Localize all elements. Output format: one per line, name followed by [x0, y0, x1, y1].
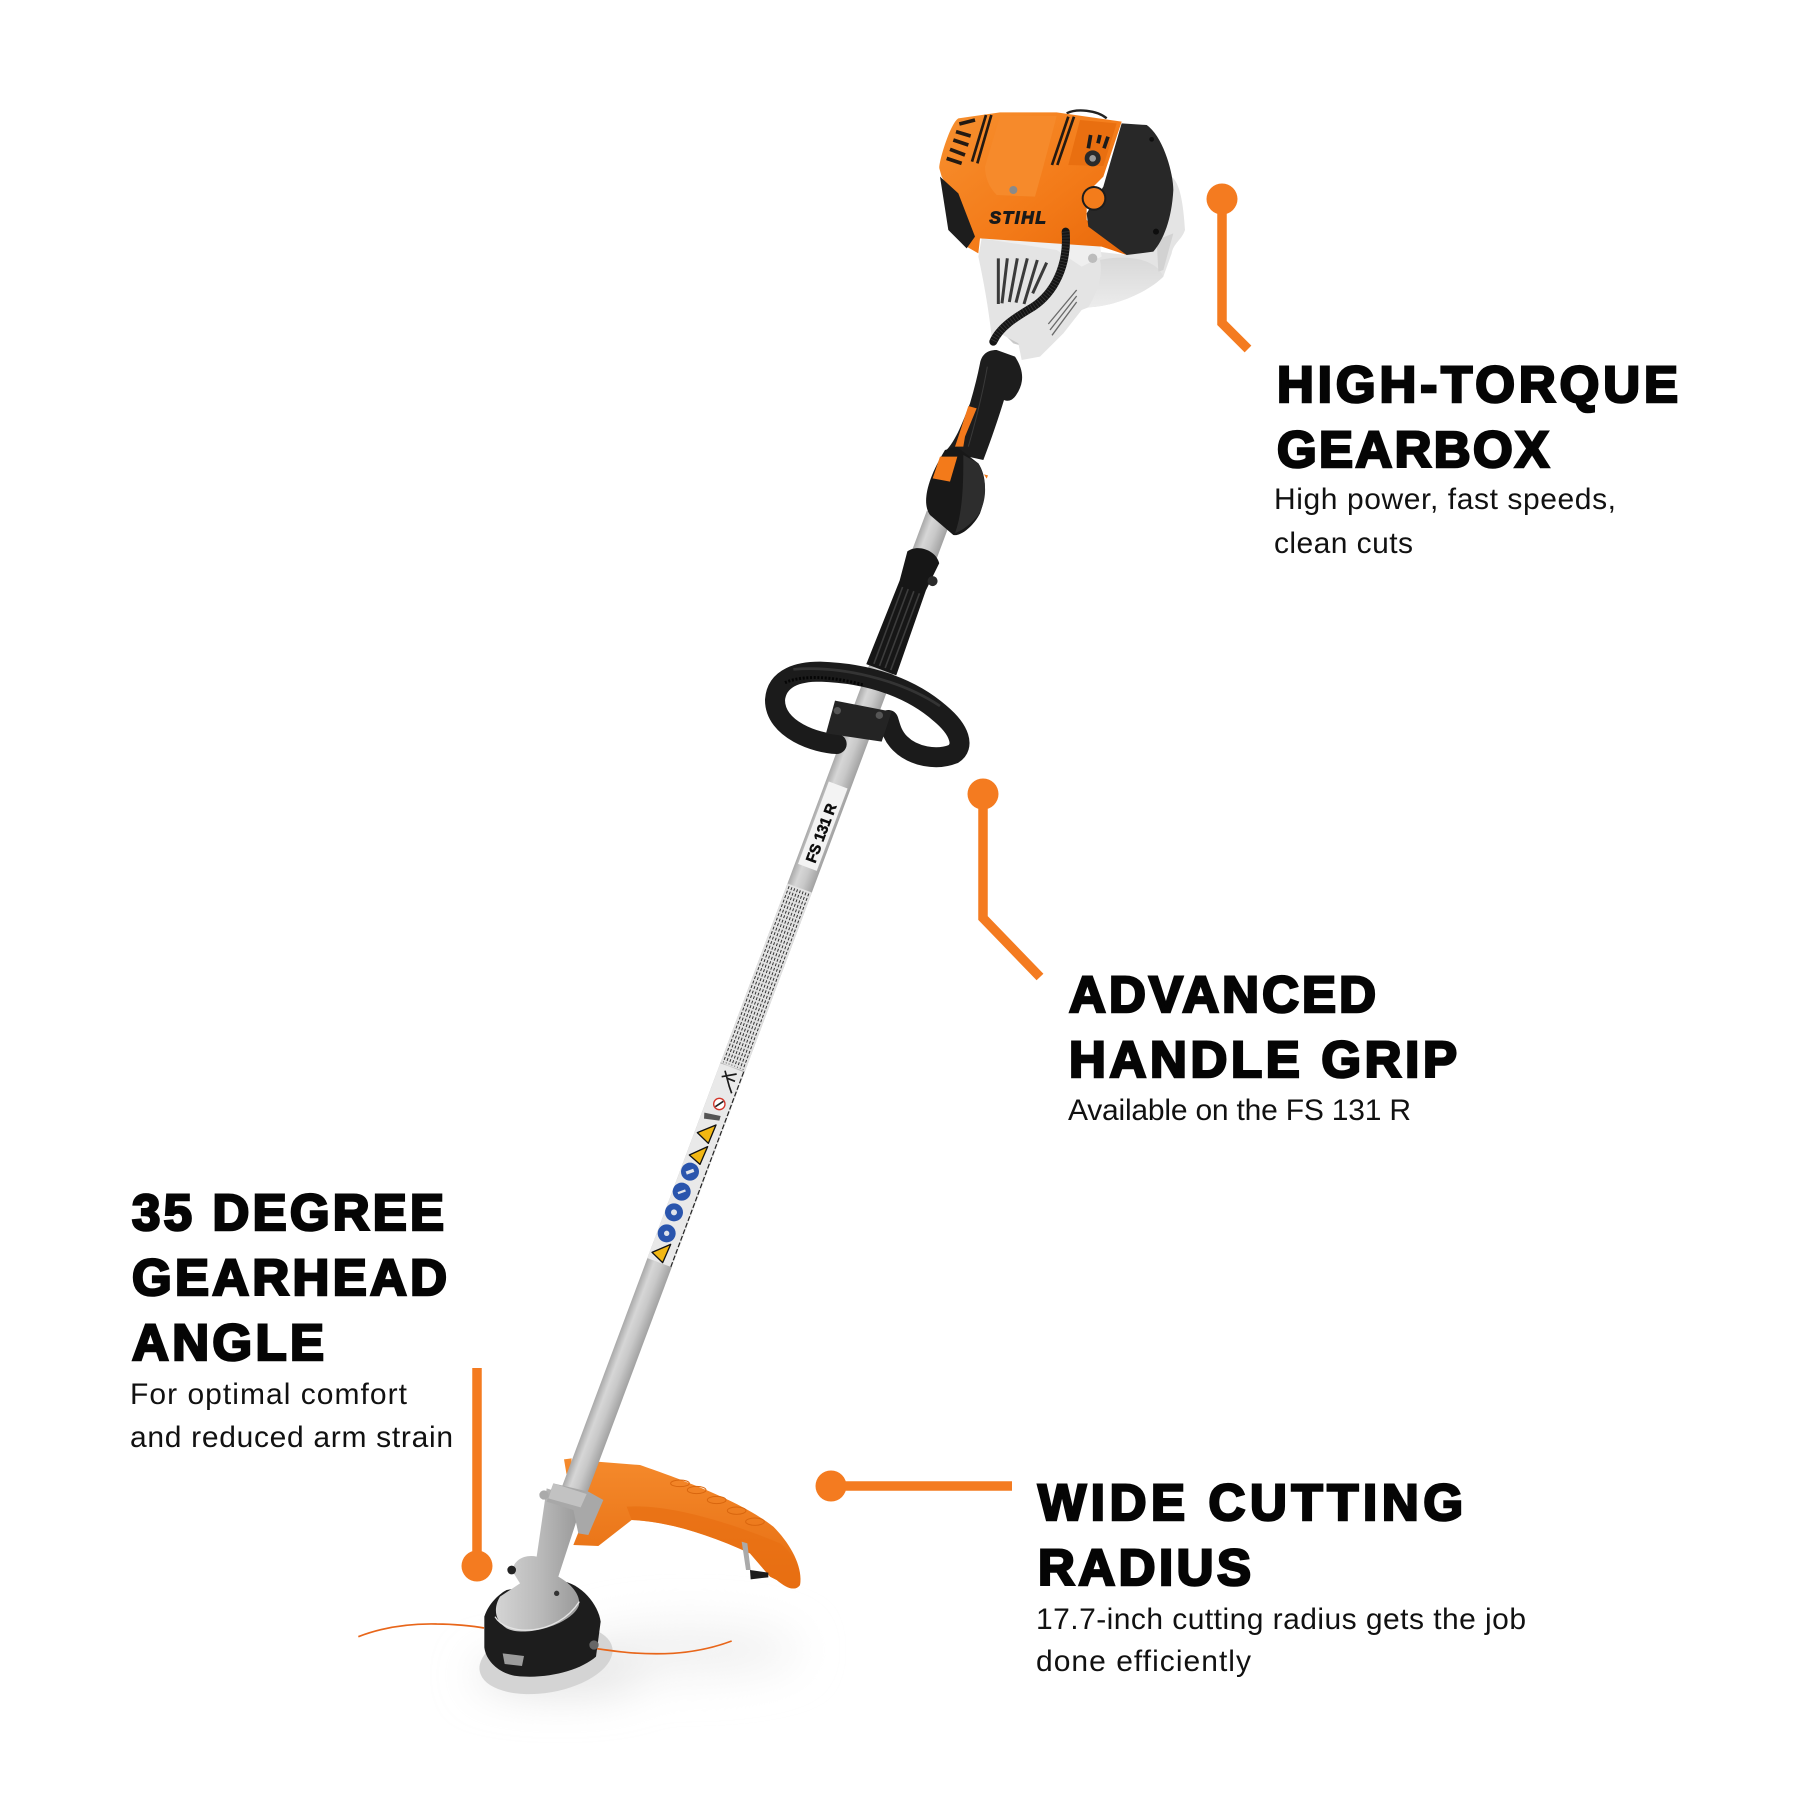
product: string trimmer	[358, 111, 1185, 1704]
mandatory blue circles	[658, 1163, 699, 1242]
heading: RADIUS	[1038, 1539, 1251, 1596]
leader line and dot	[816, 1470, 1012, 1502]
gearhead	[496, 1488, 583, 1632]
loop handle	[775, 669, 960, 757]
black shaft sleeve	[865, 544, 947, 677]
control handle	[926, 330, 1024, 535]
white lower housing	[978, 177, 1185, 360]
trimmer pictogram	[722, 1071, 737, 1093]
callout: wide cutting radius	[816, 1470, 1526, 1678]
description: Available on the FS 131 R	[1068, 1094, 1411, 1127]
handle clamp	[826, 701, 892, 742]
model label: FS 131 R: FS 131 R	[803, 801, 841, 865]
spool	[484, 1581, 601, 1677]
grass guard	[564, 1458, 801, 1589]
cowl window	[1068, 120, 1117, 166]
housing vents	[998, 258, 1047, 304]
cutting head	[358, 1483, 732, 1704]
starter cable loop	[1067, 111, 1107, 118]
model label: FS 131 R	[798, 781, 848, 871]
callout: high-torque gearbox	[1206, 184, 1678, 560]
heading: ANGLE	[132, 1314, 324, 1371]
leader line and dot	[462, 1368, 492, 1582]
cowl vents	[947, 115, 1074, 165]
engine	[939, 111, 1185, 360]
safety label background	[647, 1063, 745, 1267]
safety icons	[652, 1071, 737, 1263]
prohibition sign	[714, 1098, 725, 1110]
trimmer line	[358, 1624, 732, 1654]
warning triangles	[652, 1125, 716, 1263]
heading: HANDLE GRIP	[1069, 1031, 1457, 1088]
throttle lock and trigger	[955, 406, 977, 447]
leader line and dot	[968, 778, 1040, 977]
black side vent	[940, 177, 975, 248]
leader line and dot	[1206, 184, 1248, 349]
heading: GEARHEAD	[132, 1249, 447, 1306]
heading: WIDE CUTTING	[1038, 1474, 1463, 1531]
heading: HIGH-TORQUE	[1277, 356, 1678, 413]
description: High power, fast speeds,	[1274, 483, 1616, 516]
shaft clamp	[539, 1483, 603, 1535]
description: 17.7-inch cutting radius gets the job	[1036, 1603, 1526, 1636]
aluminium shaft	[554, 511, 951, 1517]
heading: ADVANCED	[1069, 966, 1376, 1023]
stop knob	[1082, 186, 1106, 211]
callout: 35 degree gearhead angle	[130, 1184, 492, 1582]
fine print label	[721, 883, 812, 1071]
ignition cable	[993, 232, 1066, 342]
callout: advanced handle grip	[968, 778, 1457, 1127]
description: clean cuts	[1274, 527, 1413, 560]
heading: GEARBOX	[1277, 421, 1549, 478]
black air filter cover	[1087, 123, 1173, 255]
shaft and labels	[554, 511, 951, 1517]
description: and reduced arm strain	[130, 1421, 453, 1454]
ground shadow	[475, 1626, 800, 1691]
description: done efficiently	[1036, 1645, 1251, 1678]
small tool icon	[704, 1113, 721, 1121]
centre cowl panel	[985, 116, 1057, 197]
description: For optimal comfort	[130, 1378, 408, 1411]
heading: 35 DEGREE	[132, 1184, 444, 1241]
base disc	[474, 1615, 618, 1704]
STIHL logo: STIHL	[989, 207, 1046, 227]
orange cowling	[939, 112, 1127, 255]
